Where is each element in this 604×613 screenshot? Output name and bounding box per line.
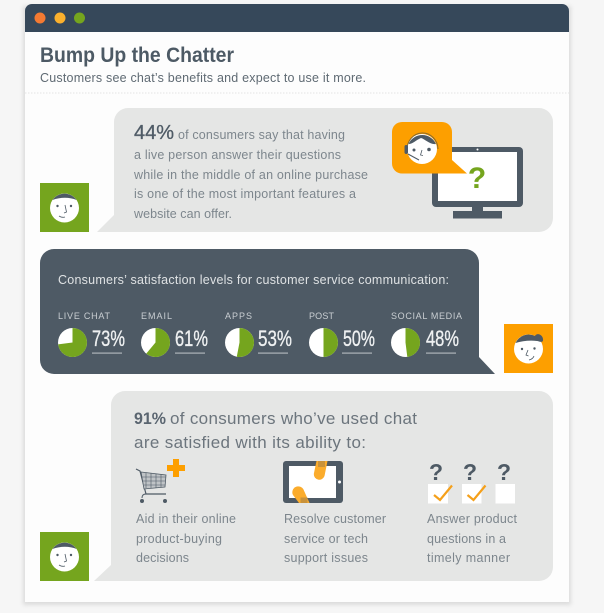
icon: monitor with question mark xyxy=(432,147,523,218)
icon: question marks and checkboxes: ? xyxy=(463,459,477,485)
pie: apps 53%: APPS xyxy=(225,311,252,321)
pie: live chat 73% xyxy=(58,311,125,357)
44% statistic text: is one of the most important features a xyxy=(134,187,356,201)
text: resolve support issues: support issues xyxy=(284,551,368,565)
pie: apps 53%: 53% xyxy=(258,326,292,351)
satisfaction heading: Consumers’ satisfaction levels for customer service communication: xyxy=(58,273,449,287)
text: product-buying decisions: decisions xyxy=(136,551,189,565)
text: resolve support issues: Resolve customer xyxy=(284,512,386,526)
91% heading xyxy=(134,409,417,452)
91% heading: 91% xyxy=(134,409,166,428)
text: answer product questions: Answer product xyxy=(427,512,518,526)
text: product-buying decisions: product-buying xyxy=(136,532,222,546)
91% heading: are satisfied with its ability to: xyxy=(134,433,366,452)
text: answer product questions xyxy=(427,512,518,565)
pie: email 61% xyxy=(141,311,208,357)
icon: tablet with bandages xyxy=(283,461,343,503)
item: product-buying decisions xyxy=(136,459,236,565)
text: resolve support issues xyxy=(284,512,386,565)
avatar: orange woman xyxy=(504,324,553,373)
subtitle: Customers see chat’s benefits and expect to use it more. xyxy=(40,71,366,85)
44% statistic text: a live person answer their questions xyxy=(134,148,341,162)
pie: social media 48%: 48% xyxy=(426,326,459,351)
text: product-buying decisions: Aid in their online xyxy=(136,512,236,526)
pie: live chat 73%: 73% xyxy=(92,326,125,351)
text: answer product questions: questions in a xyxy=(427,532,506,546)
icon: question marks and checkboxes: ? xyxy=(429,459,443,485)
pie: email 61%: EMAIL xyxy=(141,311,172,321)
44% statistic text: 44% xyxy=(134,121,174,144)
avatar: green man 1 xyxy=(40,183,89,232)
icon: question marks and checkboxes xyxy=(428,459,515,504)
pie: email 61%: 61% xyxy=(175,326,208,351)
avatar: green man 2 xyxy=(40,532,89,581)
44% statistic text: of consumers say that having xyxy=(178,128,345,142)
item: resolve support issues xyxy=(283,461,386,565)
icon: monitor with question mark: ? xyxy=(468,162,486,195)
pie: apps 53% xyxy=(225,311,292,357)
icon: agent speech bubble with headset xyxy=(392,122,467,174)
pie: live chat 73%: LIVE CHAT xyxy=(58,311,110,321)
icon: shopping cart with plus xyxy=(136,459,185,503)
panel: 44% speech bubble xyxy=(97,108,553,232)
pie: social media 48% xyxy=(391,311,462,357)
text: product-buying decisions xyxy=(136,512,236,565)
44% statistic text: website can offer. xyxy=(133,207,232,221)
text: resolve support issues: service or tech xyxy=(284,532,368,546)
panel: satisfaction levels speech bubble xyxy=(40,249,495,374)
title: Bump Up the Chatter xyxy=(40,44,234,67)
pie: post 50%: POST xyxy=(309,311,334,321)
pie: post 50%: 50% xyxy=(343,326,375,351)
pie: post 50% xyxy=(309,311,375,357)
91% heading: of consumers who’ve used chat xyxy=(170,409,417,428)
44% statistic text xyxy=(133,121,368,221)
icon: question marks and checkboxes: ? xyxy=(497,459,511,485)
pie: social media 48%: SOCIAL MEDIA xyxy=(391,311,462,321)
item: answer product questions xyxy=(427,459,518,565)
text: answer product questions: timely manner xyxy=(427,551,510,565)
panel: 91% speech bubble xyxy=(94,391,553,581)
window control buttons xyxy=(34,12,85,24)
44% statistic text: while in the middle of an online purchase xyxy=(133,168,368,182)
